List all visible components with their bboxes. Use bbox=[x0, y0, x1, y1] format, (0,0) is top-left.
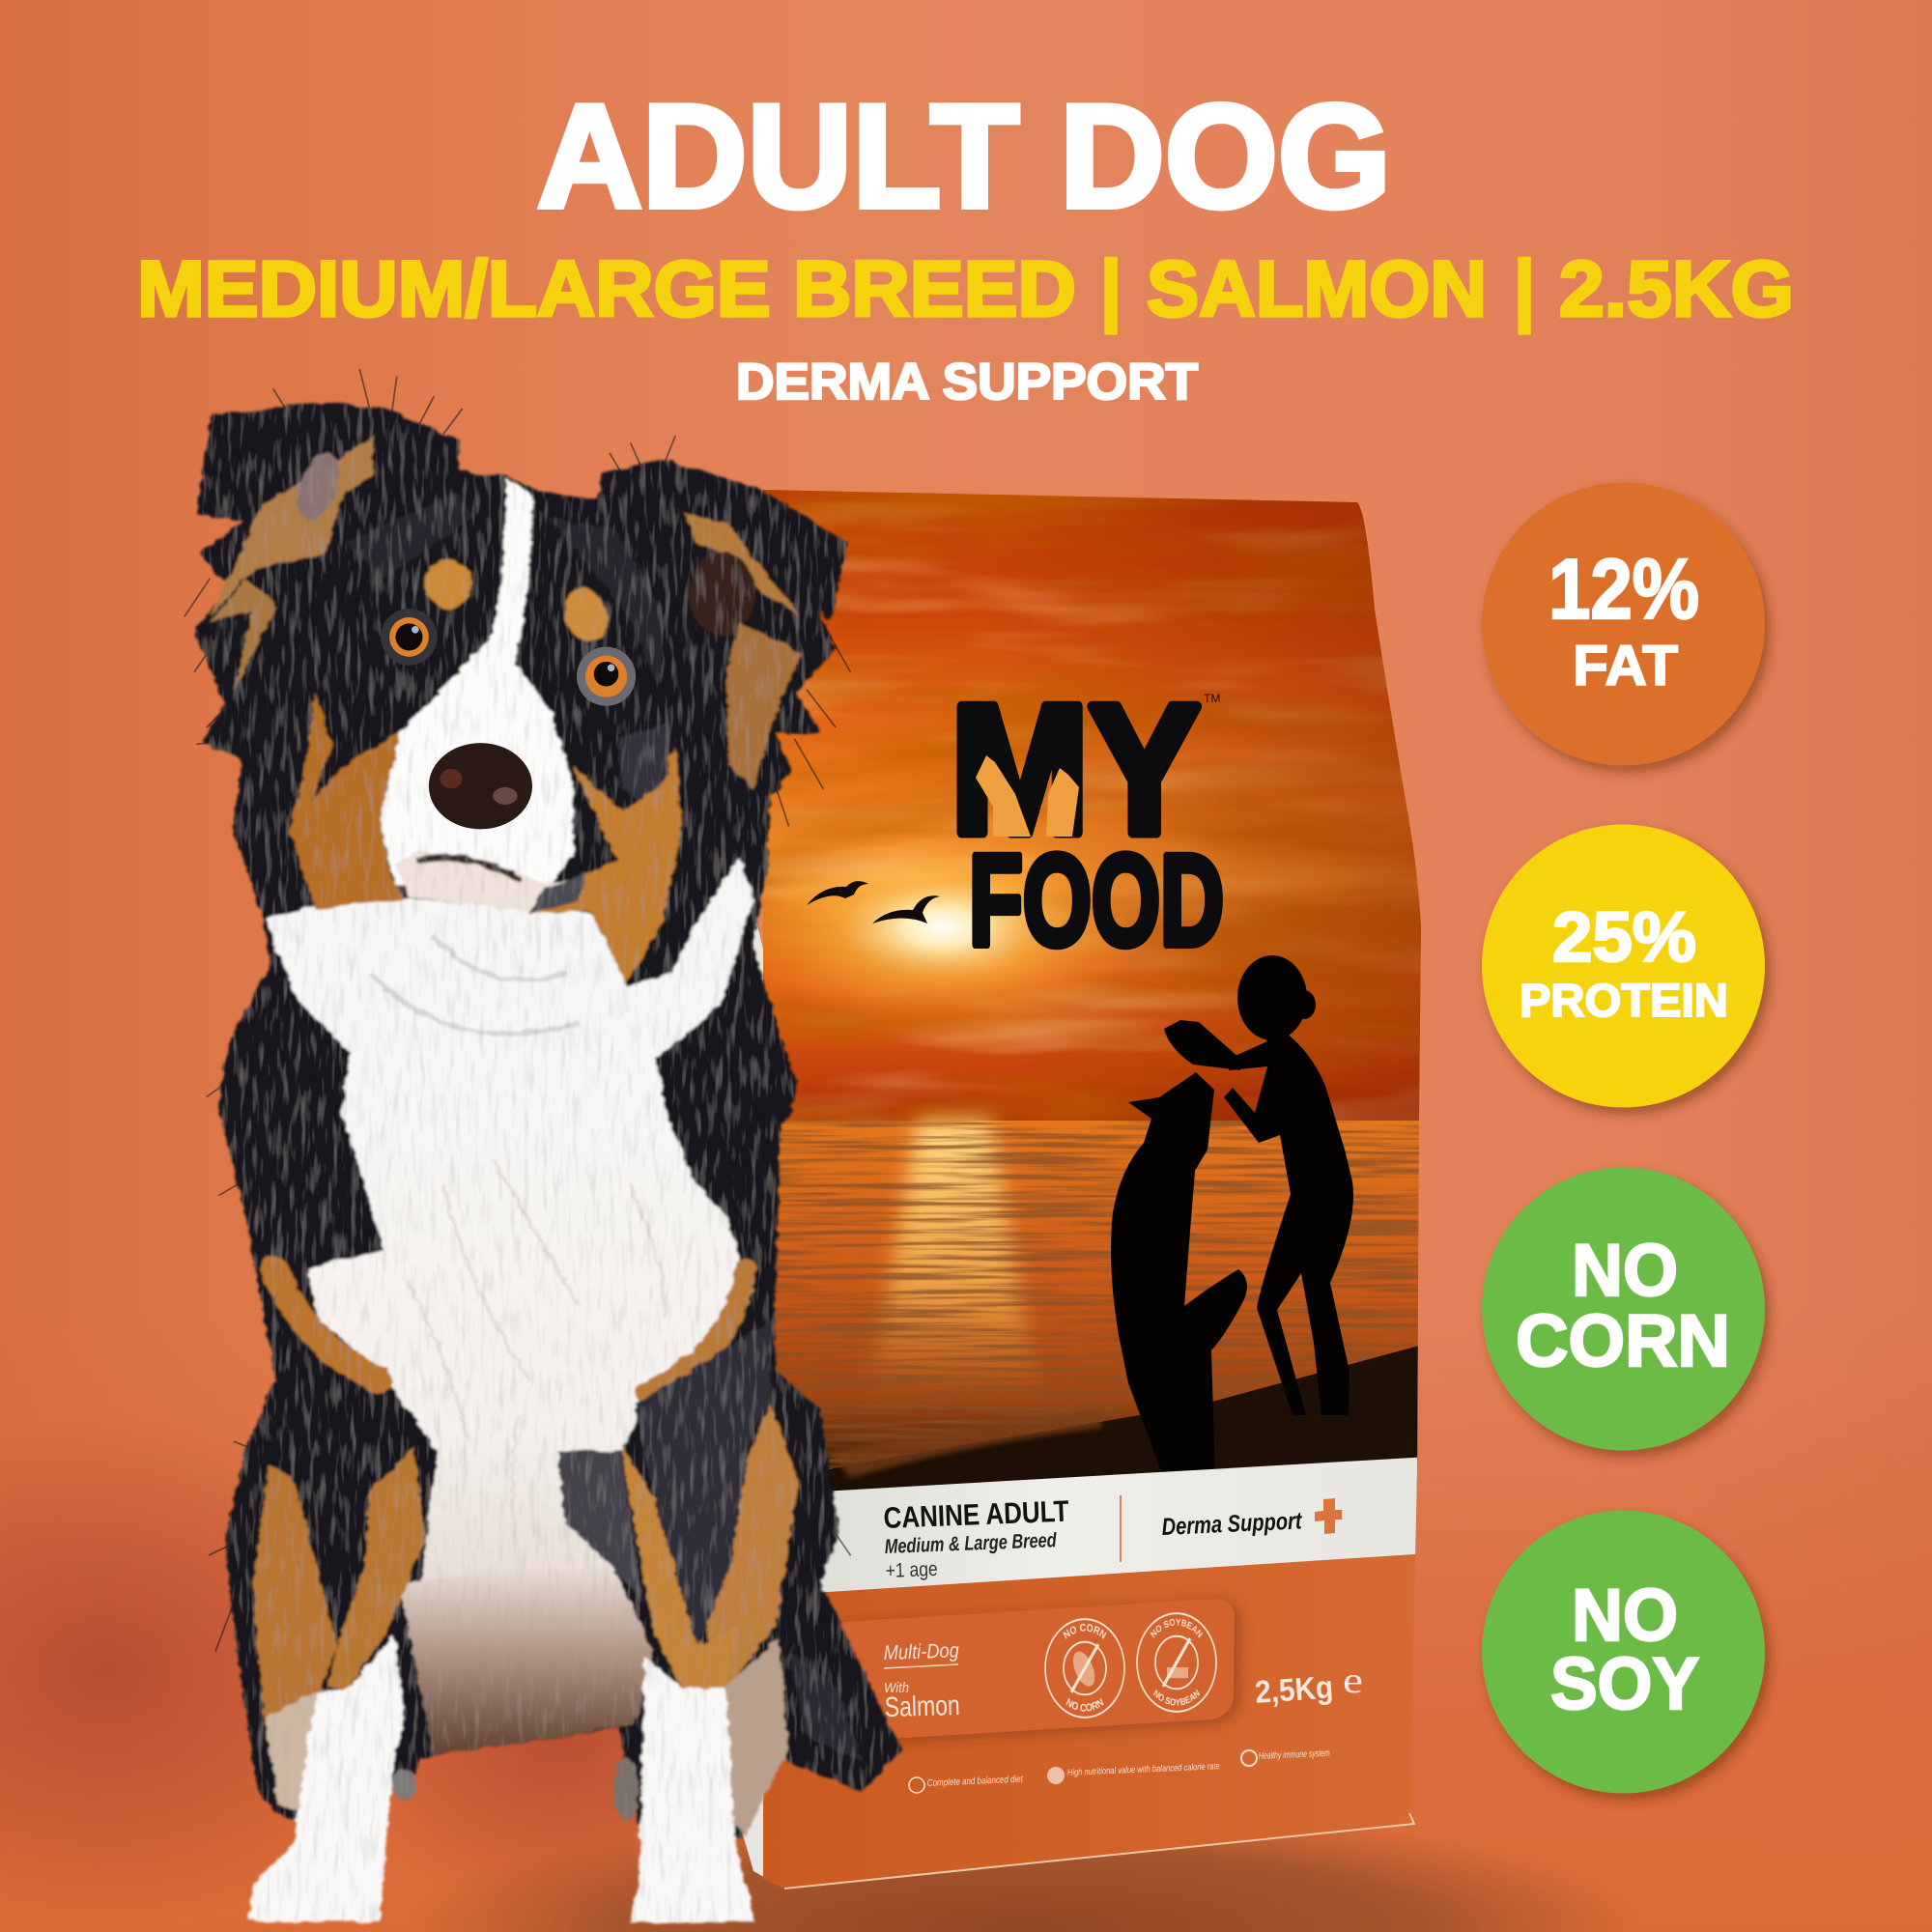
tagline: DERMA SUPPORT bbox=[736, 354, 1198, 411]
benefit: immune system bbox=[1241, 1748, 1330, 1766]
benefit: complete diet: Complete and balanced diet bbox=[927, 1775, 1024, 1789]
brand logo: MY bbox=[951, 668, 1200, 872]
stat: no soy bbox=[1482, 1511, 1765, 1793]
front legs bbox=[247, 1321, 770, 1922]
title: ADULT DOG bbox=[537, 74, 1391, 239]
stat: 12% fat bbox=[1482, 483, 1765, 765]
badge: no corn bbox=[1044, 1618, 1125, 1719]
fur tufts bbox=[185, 370, 850, 1651]
dark patch bbox=[617, 722, 670, 801]
label: derma support: Derma Support bbox=[1161, 1507, 1303, 1541]
eyebrows bbox=[416, 551, 481, 617]
benefit: immune system: Healthy immune system bbox=[1259, 1748, 1330, 1762]
head bbox=[210, 437, 801, 983]
benefit: nutritional value: High nutritional value with balanced calorie rate bbox=[1067, 1761, 1220, 1778]
silhouette: woman and dog bbox=[1111, 955, 1353, 1478]
info pill bbox=[811, 1599, 1235, 1742]
muzzle bbox=[395, 850, 586, 912]
brand logo bbox=[951, 668, 1224, 973]
badge: no corn: NO CORN bbox=[1063, 1623, 1107, 1639]
stat: no soy: SOY bbox=[1550, 1643, 1699, 1725]
badge: no corn: NO CORN bbox=[1065, 1698, 1103, 1712]
rear legs bbox=[252, 1405, 799, 1835]
badge: no soybean bbox=[1137, 1613, 1216, 1712]
subtitle: SALMON bbox=[1147, 245, 1487, 333]
tan cheek right bbox=[528, 747, 681, 983]
bottom orange panel bbox=[753, 1553, 1430, 1898]
white blaze bbox=[380, 478, 573, 890]
left ear inner bbox=[210, 437, 373, 616]
subtitle: 2.5KG bbox=[1559, 245, 1794, 333]
net weight: e bbox=[1343, 1661, 1363, 1701]
subtitle: | bbox=[1100, 245, 1122, 334]
badge: no soybean: NO SOYBEAN bbox=[1150, 1619, 1204, 1638]
pill text: With bbox=[884, 1680, 909, 1696]
benefit: complete diet bbox=[909, 1775, 1024, 1793]
brand logo: TM bbox=[1204, 692, 1220, 705]
stat: no corn bbox=[1482, 1167, 1765, 1451]
ruff shading bbox=[370, 936, 579, 1034]
pill text bbox=[883, 1639, 960, 1723]
bag bottom edge bbox=[784, 1813, 1414, 1889]
stat: 25% protein: PROTEIN bbox=[1520, 976, 1728, 1027]
icon: plus bbox=[1315, 1498, 1342, 1534]
label divider bbox=[1120, 1495, 1122, 1562]
forehead sheen bbox=[345, 493, 666, 690]
bag front artwork bbox=[739, 483, 1430, 1898]
left ear fur bbox=[210, 579, 277, 690]
pill text: Salmon bbox=[884, 1690, 960, 1723]
label: canine adult bbox=[883, 1494, 1071, 1582]
subtitle: MEDIUM/LARGE BREED bbox=[137, 245, 1076, 333]
dog silhouette bbox=[196, 404, 899, 1835]
left eye bbox=[381, 609, 438, 666]
stat: no corn: CORN bbox=[1516, 1300, 1730, 1382]
dog fur body bbox=[196, 404, 899, 1922]
tan cheek left bbox=[290, 693, 404, 909]
badge: no soybean: NO SOYBEAN bbox=[1153, 1689, 1200, 1706]
net weight bbox=[1254, 1661, 1363, 1710]
label: canine adult: Medium & Large Breed bbox=[884, 1529, 1058, 1558]
neck ruff bbox=[265, 856, 754, 1087]
product bag bbox=[676, 467, 1421, 1924]
right eye bbox=[577, 647, 636, 706]
chin shadow bbox=[529, 872, 586, 914]
bottom label band bbox=[753, 1457, 1430, 1599]
tail highlight bbox=[788, 1651, 863, 1762]
stat: 12% fat: FAT bbox=[1573, 635, 1678, 697]
stat: 25% protein: 25% bbox=[1552, 898, 1696, 977]
subtitle bbox=[137, 245, 1794, 334]
net weight: 2,5Kg bbox=[1254, 1668, 1334, 1710]
pill text: Multi-Dog bbox=[883, 1639, 959, 1664]
stat: 25% protein bbox=[1482, 825, 1765, 1107]
bag gusset bbox=[715, 908, 787, 1889]
dog bbox=[185, 370, 899, 1922]
brand logo: FOOD bbox=[969, 829, 1224, 973]
chest fur bbox=[273, 1047, 746, 1756]
label: canine adult: +1 age bbox=[885, 1558, 938, 1582]
dog face details bbox=[381, 609, 636, 829]
benefit: nutritional value bbox=[1047, 1761, 1220, 1784]
label: canine adult: CANINE ADULT bbox=[883, 1494, 1069, 1535]
nose bbox=[429, 743, 532, 829]
stat: 12% fat: 12% bbox=[1548, 541, 1699, 637]
stat: no corn: NO bbox=[1572, 1230, 1678, 1312]
mouth bbox=[417, 858, 520, 880]
stat: no soy: NO bbox=[1572, 1575, 1678, 1657]
subtitle: | bbox=[1514, 245, 1535, 334]
right ear inner bbox=[684, 511, 801, 616]
birds bbox=[807, 881, 940, 923]
